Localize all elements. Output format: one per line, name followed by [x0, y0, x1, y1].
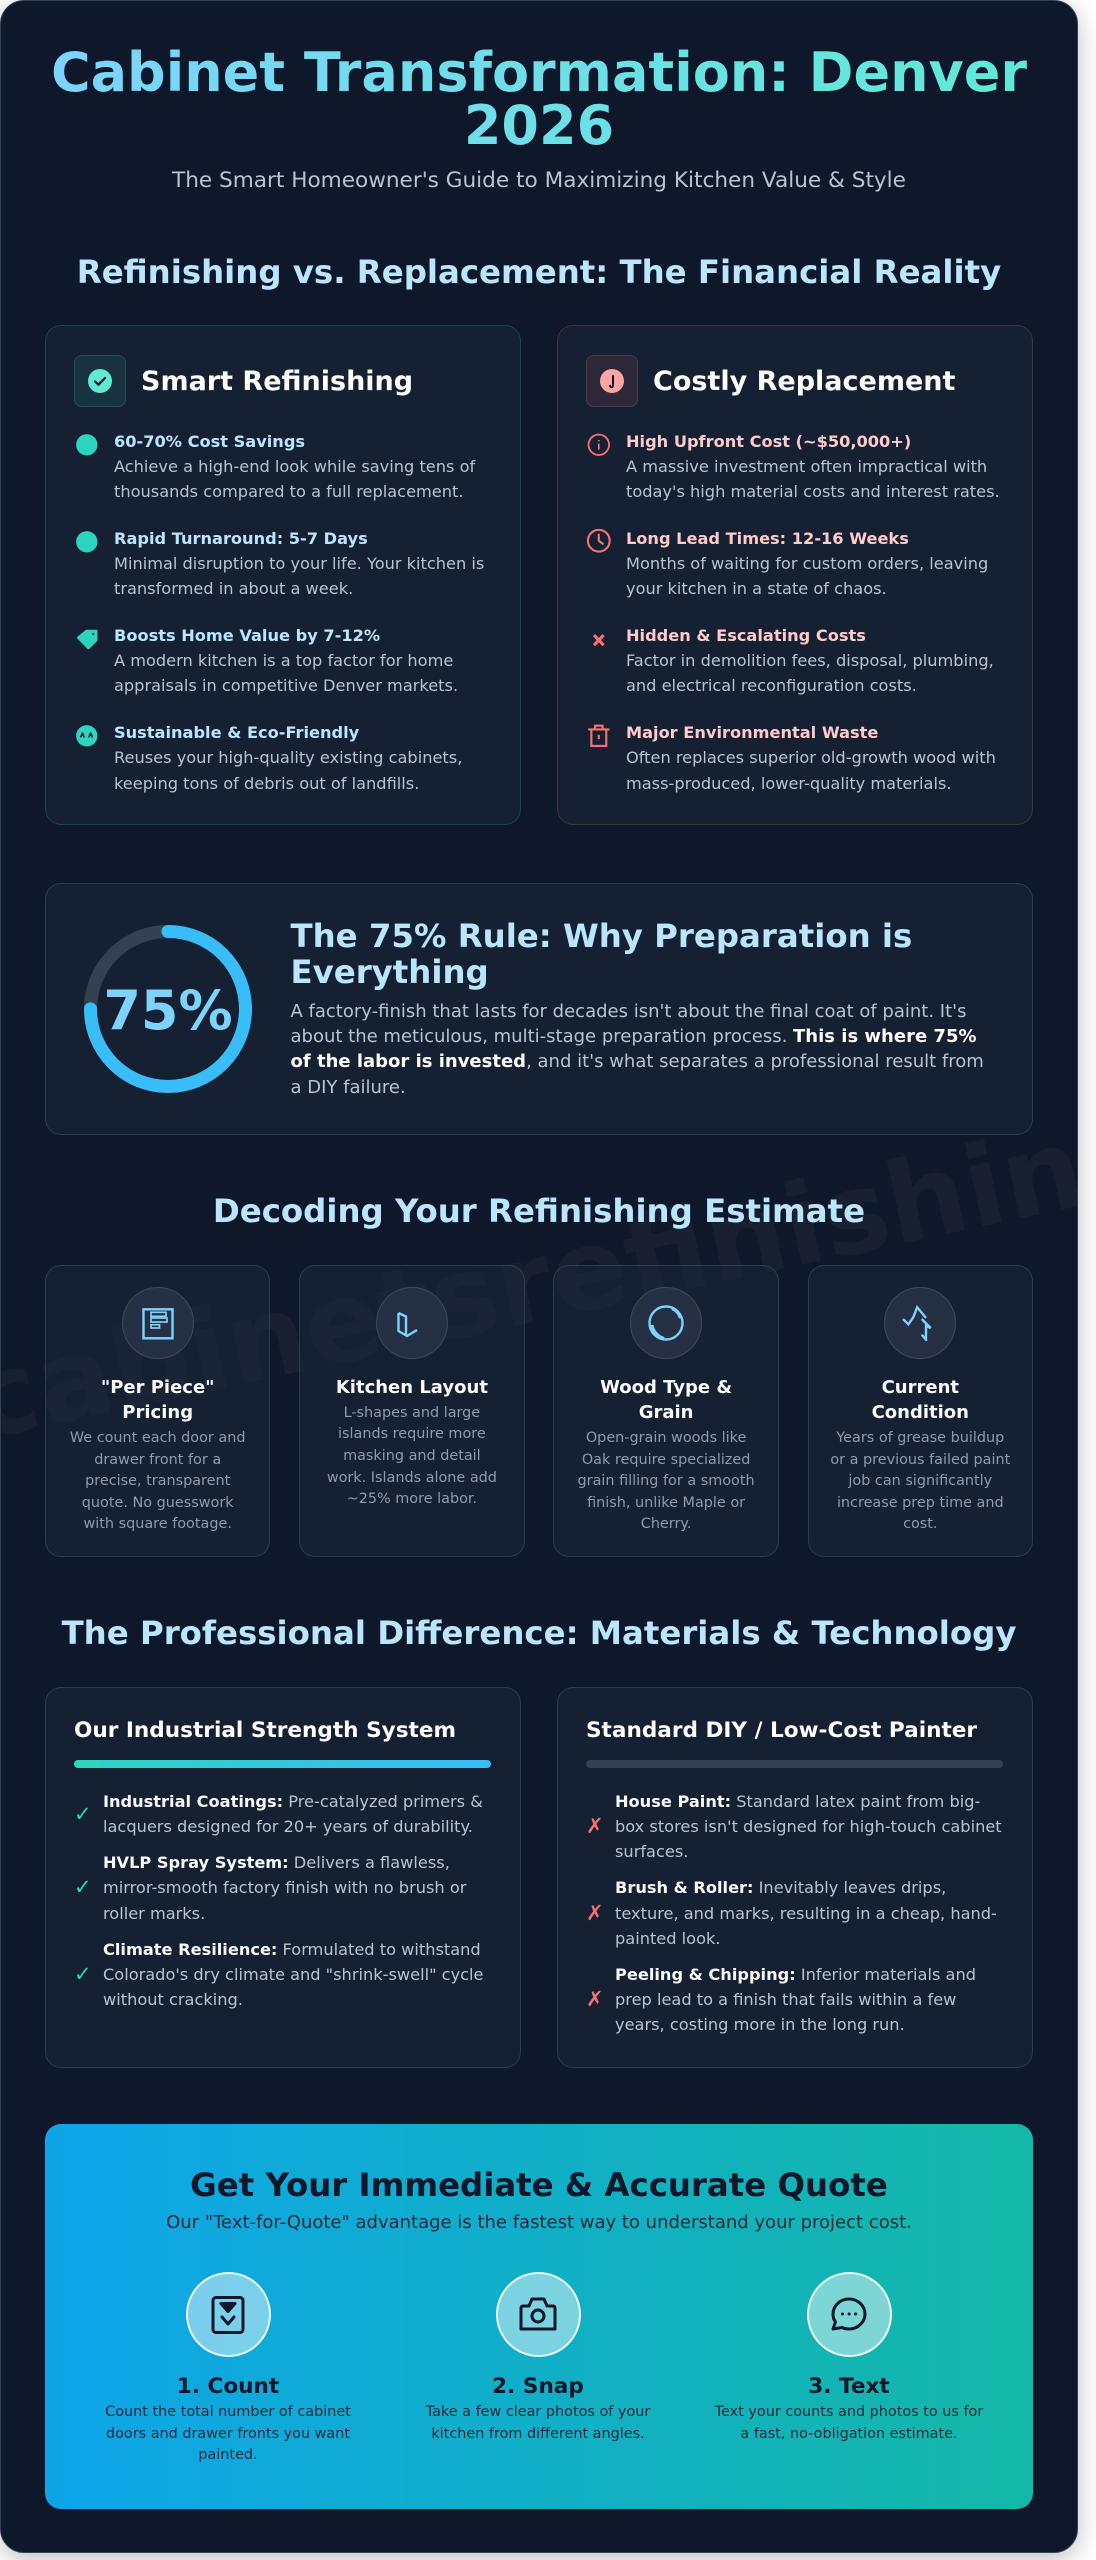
- panel heading: costly replacement: [586, 355, 955, 407]
- list item: spray system: HVLP Spray System: Delivers a flawless,: [103, 1853, 450, 1872]
- card: per piece pricing: We count each door and: [70, 1430, 245, 1446]
- panel: industrial strength system: [45, 1687, 521, 2068]
- card: per piece pricing: [45, 1265, 270, 1557]
- step: text: a fast, no-obligation estimate.: [740, 2426, 958, 2442]
- list item: spray system: [74, 1853, 466, 1923]
- benefit: home value: A modern kitchen is a top factor for home: [114, 651, 453, 670]
- card: kitchen layout: L-shapes and large: [344, 1405, 480, 1421]
- card: wood type: finish, unlike Maple or: [587, 1495, 745, 1511]
- heading: our system: Our Industrial Strength System: [74, 1718, 456, 1743]
- chart: 75% progress ring: 75%: [103, 979, 233, 1042]
- drawback: waste: [588, 723, 996, 793]
- list item: spray system: ✓: [74, 1875, 92, 1899]
- title: 2026: [464, 94, 614, 157]
- drawback: upfront cost: today's high material costs and interest rates.: [626, 482, 1000, 501]
- card: wood type: Wood Type &: [600, 1377, 732, 1398]
- card: per piece pricing: Pricing: [122, 1402, 193, 1423]
- heading: quote: Get Your Immediate & Accurate Quote: [190, 2166, 888, 2204]
- list item: climate: ✓: [74, 1962, 92, 1986]
- card: wood type: Open-grain woods like: [586, 1430, 746, 1446]
- benefit: cost savings: 60-70% Cost Savings: [114, 432, 305, 450]
- card: per piece pricing: quote. No guesswork: [82, 1495, 234, 1511]
- heading: standard DIY: Standard DIY / Low-Cost Painter: [586, 1718, 977, 1743]
- card: kitchen layout: work. Islands alone add: [327, 1470, 497, 1486]
- heading: 75% rule: Everything: [290, 953, 489, 991]
- list item: climate: Climate Resilience: Formulated to withstand: [103, 1940, 481, 1959]
- step: text: Text your counts and photos to us for: [715, 2404, 983, 2420]
- list item: house paint: [586, 1792, 1002, 1861]
- list item: house paint: House Paint: Standard latex paint from big-: [615, 1792, 980, 1811]
- icon: count: [186, 2272, 270, 2357]
- benefit: rapid turnaround: transformed in about a week.: [114, 579, 353, 598]
- icon: check badge: [74, 355, 126, 407]
- card: current condition: Current: [882, 1377, 959, 1398]
- panel: 75% rule: [45, 883, 1033, 1135]
- title: [1, 46, 1077, 152]
- panel heading: costly replacement: Costly Replacement: [653, 366, 955, 397]
- benefit: rapid turnaround: [76, 529, 484, 598]
- text: 75% rule explanation: about the meticulous, multi-stage preparation process. This is where 75%: [290, 1026, 977, 1047]
- card: current condition: Years of grease buildup: [836, 1430, 1004, 1446]
- card: wood type: Grain: [639, 1402, 693, 1423]
- list item: climate: without cracking.: [103, 1990, 243, 2009]
- benefit: cost savings: Achieve a high-end look while saving tens of: [114, 457, 475, 476]
- list item: spray system: mirror-smooth factory finish with no brush or: [103, 1878, 466, 1897]
- icon: wood grain ring: [630, 1287, 702, 1359]
- card: current condition: Condition: [872, 1402, 969, 1423]
- drawback: upfront cost: [588, 432, 1000, 501]
- benefit: home value: [76, 626, 458, 695]
- list item: brush and roller: [586, 1878, 997, 1948]
- card: kitchen layout: islands require more: [338, 1426, 486, 1442]
- drawback: waste: Major Environmental Waste: [626, 723, 878, 742]
- card: current condition: increase prep time and: [837, 1495, 1004, 1511]
- drawback: lead times: Long Lead Times: 12-16 Weeks: [626, 529, 909, 548]
- text: 75% rule explanation: of the labor is invested, and it's what separates a professional result from: [290, 1051, 984, 1072]
- drawback: upfront cost: High Upfront Cost (~$50,000+): [626, 432, 911, 450]
- step: count: 1. Count: [177, 2374, 279, 2399]
- list item: house paint: surfaces.: [615, 1842, 688, 1861]
- benefit: cost savings: [76, 432, 476, 501]
- card: current condition: cost.: [903, 1516, 938, 1532]
- card: current condition: [808, 1265, 1033, 1557]
- list item: peeling: years, costing more in the long run.: [615, 2015, 905, 2034]
- card: wood type: Cherry.: [641, 1516, 691, 1532]
- drawback: lead times: your kitchen in a state of chaos.: [626, 579, 887, 598]
- drawback: waste: Often replaces superior old-growth wood with: [626, 748, 996, 767]
- card: per piece pricing: with square footage.: [83, 1516, 232, 1532]
- benefit: rapid turnaround: Minimal disruption to your life. Your kitchen is: [114, 554, 484, 573]
- panel: smart refinishing: [45, 325, 521, 825]
- title: Cabinet Transformation: Denver: [51, 41, 1027, 104]
- drawback: lead times: [586, 529, 988, 598]
- section heading: estimate: Decoding Your Refinishing Estimate: [213, 1192, 865, 1230]
- card: per piece pricing: precise, transparent: [85, 1473, 230, 1489]
- card: kitchen layout: [299, 1265, 525, 1557]
- step: snap: kitchen from different angles.: [431, 2426, 645, 2442]
- drawback: lead times: Months of waiting for custom orders, leaving: [626, 554, 988, 573]
- list item: coatings: [74, 1792, 483, 1836]
- list item: house paint: ✗: [586, 1814, 604, 1838]
- list item: brush and roller: ✗: [586, 1901, 604, 1925]
- list item: coatings: Industrial Coatings: Pre-catalyzed primers &: [103, 1792, 483, 1811]
- drawback: hidden costs: [592, 626, 994, 695]
- icon: L-shape: [376, 1287, 448, 1359]
- list item: brush and roller: Brush & Roller: Inevitably leaves drips,: [615, 1878, 946, 1897]
- card: kitchen layout: Kitchen Layout: [336, 1377, 488, 1398]
- list item: climate: [74, 1940, 484, 2009]
- icon: crack: [884, 1287, 956, 1359]
- chart: 75% progress ring: [84, 925, 252, 1093]
- list item: coatings: lacquers designed for 20+ years of durability.: [103, 1817, 473, 1836]
- drawback: hidden costs: Hidden & Escalating Costs: [626, 626, 866, 645]
- icon: chat bubble: [806, 2272, 892, 2357]
- drawback: hidden costs: Factor in demolition fees, disposal, plumbing,: [626, 651, 994, 670]
- card: current condition: or a previous failed paint: [830, 1452, 1010, 1468]
- card: current condition: job can significantly: [848, 1473, 992, 1489]
- panel: call to action quote: [45, 2124, 1033, 2509]
- panel heading: smart refinishing: [74, 355, 413, 407]
- benefit: home value: appraisals in competitive Denver markets.: [114, 676, 458, 695]
- text: 75% rule explanation: a DIY failure.: [290, 1077, 406, 1098]
- list item: brush and roller: texture, and marks, resulting in a cheap, hand-: [615, 1904, 997, 1923]
- subtitle: The Smart Homeowner's Guide to Maximizing Kitchen Value & Style: [172, 168, 906, 193]
- card: kitchen layout: ~25% more labor.: [347, 1491, 477, 1507]
- benefit: eco friendly: keeping tons of debris out of landfills.: [114, 774, 419, 793]
- list item: peeling: prep lead to a finish that fails within a few: [615, 1990, 956, 2009]
- panel: costly replacement: [557, 325, 1033, 825]
- list item: peeling: ✗: [586, 1987, 604, 2011]
- card: wood type: grain filling for a smooth: [578, 1473, 755, 1489]
- benefit: home value: Boosts Home Value by 7-12%: [114, 626, 380, 645]
- text: quote subheading: Our "Text-for-Quote" advantage is the fastest way to understand your project cost.: [166, 2212, 912, 2233]
- text: 75% rule explanation: [290, 1001, 984, 1098]
- benefit: cost savings: thousands compared to a full replacement.: [114, 482, 464, 501]
- card: kitchen layout: masking and detail: [343, 1448, 481, 1464]
- drawback: waste: mass-produced, lower-quality materials.: [626, 774, 952, 793]
- list item: house paint: box stores isn't designed for high-touch cabinet: [615, 1817, 1002, 1836]
- step: count: Count the total number of cabinet: [105, 2404, 351, 2420]
- card: wood type: Oak require specialized: [582, 1452, 750, 1468]
- step: snap: [426, 2272, 650, 2442]
- panel: standard DIY: [557, 1687, 1033, 2068]
- heading: 75% rule: The 75% Rule: Why Preparation is: [290, 917, 912, 955]
- benefit: eco friendly: Reuses your high-quality existing cabinets,: [114, 748, 462, 767]
- list item: peeling: Peeling & Chipping: Inferior materials and: [615, 1965, 976, 1984]
- step: text: 3. Text: [808, 2374, 890, 2399]
- list item: spray system: roller marks.: [103, 1904, 205, 1923]
- section heading: financial reality: Refinishing vs. Replacement: The Financial Reality: [77, 253, 1001, 291]
- drawback: upfront cost: A massive investment often impractical with: [626, 457, 987, 476]
- benefit: rapid turnaround: Rapid Turnaround: 5-7 Days: [114, 529, 368, 548]
- heading: 75% rule: [290, 917, 912, 991]
- section heading: materials and technology: The Professional Difference: Materials & Technology: [62, 1614, 1016, 1652]
- text: 75% rule explanation: A factory-finish that lasts for decades isn't about the final coat of paint. It's: [290, 1001, 966, 1022]
- list item: climate: Colorado's dry climate and "shrink-swell" cycle: [103, 1965, 484, 1984]
- benefit: eco friendly: Sustainable & Eco-Friendly: [114, 723, 359, 742]
- list item: peeling: [586, 1965, 976, 2034]
- step: text: [714, 2272, 984, 2442]
- list item: coatings: ✓: [74, 1802, 92, 1826]
- icon: camera: [496, 2272, 580, 2357]
- panel heading: smart refinishing: Smart Refinishing: [141, 366, 413, 397]
- step: snap: 2. Snap: [492, 2374, 584, 2399]
- step: snap: Take a few clear photos of your: [426, 2404, 650, 2420]
- benefit: eco friendly: [76, 723, 462, 793]
- step: count: painted.: [198, 2447, 258, 2463]
- list item: brush and roller: painted look.: [615, 1929, 721, 1948]
- step: count: doors and drawer fronts you want: [106, 2426, 350, 2442]
- icon: document: [122, 1287, 194, 1359]
- card: per piece pricing: drawer front for a: [94, 1452, 221, 1468]
- card: wood type: [553, 1265, 779, 1557]
- step: count: [105, 2272, 351, 2463]
- card: per piece pricing: "Per Piece": [101, 1377, 215, 1398]
- drawback: hidden costs: and electrical reconfiguration costs.: [626, 676, 917, 695]
- icon: alert badge: [586, 355, 638, 407]
